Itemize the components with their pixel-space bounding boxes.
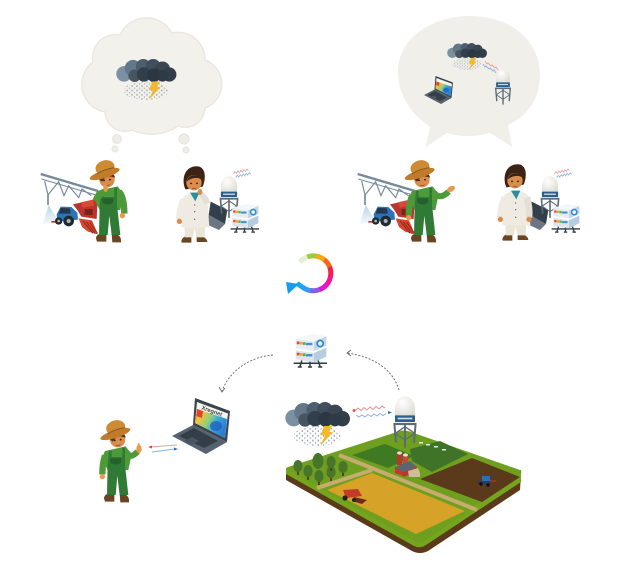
icon: radar tower on farm [394,396,416,448]
icon: rainbow cycle arrow [286,256,331,294]
dark grass field [352,444,414,468]
irrigation sprinklers [419,442,446,450]
icon: radar tower in speech bubble [495,69,511,105]
icon: radar tower, right scientist [541,176,559,218]
laptop brand label: Xregnet [200,405,223,418]
icon: server, left scientist [231,204,259,232]
icon: storm cloud in speech bubble [447,43,487,70]
icon: radar tower, left scientist [220,176,238,218]
arrows: farmer and laptop exchange [148,445,178,452]
group: laptop and radar waves, right scientist [526,169,572,230]
crop field [410,441,468,472]
speech bubble shape [398,16,540,147]
arrow: server to laptop [219,355,273,392]
panel: isometric farm [286,430,522,553]
radar waves between cloud and radar [353,406,392,417]
icon: laptop with forecast map [172,398,230,454]
thought cloud shape [82,18,222,134]
trees [293,453,348,485]
wheat field [327,473,465,534]
radar waves in speech bubble [483,61,498,73]
figure: talking farmer [404,158,456,242]
icon: laptop in speech bubble [424,76,453,104]
barn and silos [395,451,420,477]
arrow: radar to server [347,350,399,390]
panel: thought bubble [82,18,222,153]
group: left farmer machinery [41,174,98,234]
icon: storm cloud over farm [285,402,350,446]
figure: thinking scientist [177,166,209,243]
icon: server, right scientist [552,204,580,232]
panel: speech bubble [398,16,540,147]
harvester on wheat field [342,489,367,504]
tractor on dirt field [478,476,496,487]
icon: storm cloud in thought [116,59,176,100]
farm surface [286,430,522,542]
thought bubble dots [112,134,189,153]
farm base [286,468,521,553]
dirt field [420,458,520,502]
icon: central server [294,334,327,367]
figure: thumbs-up farmer [99,418,142,502]
group: right farmer machinery [358,174,415,234]
group: laptop and radar waves, left scientist [205,169,251,230]
figure: talking scientist [498,164,532,241]
figure: thinking farmer [89,158,125,242]
roads [317,455,477,510]
